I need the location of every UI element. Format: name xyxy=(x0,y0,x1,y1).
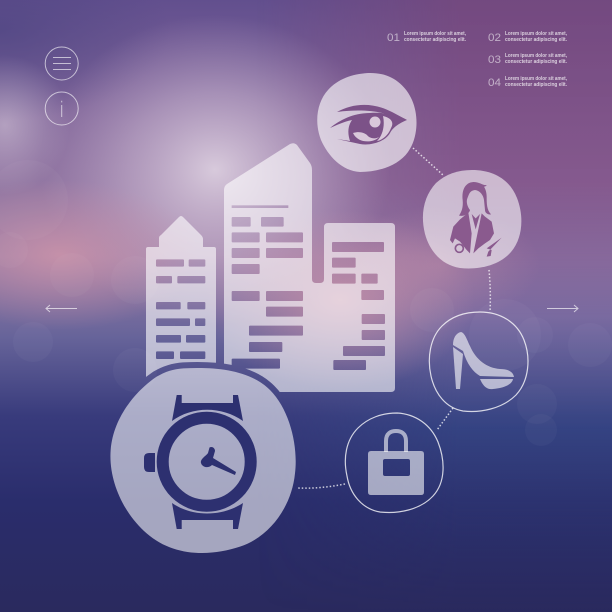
item 04: Lorem ipsum dolor sit amet, xyxy=(505,76,568,82)
legend list xyxy=(387,31,568,89)
item 02: Lorem ipsum dolor sit amet, xyxy=(505,31,568,37)
item 03: 03 xyxy=(488,54,501,66)
middle and right building xyxy=(224,143,395,392)
right arrow xyxy=(547,305,578,312)
item 03: consectetur adipiscing elit. xyxy=(505,59,568,65)
bag outline xyxy=(345,413,443,512)
icon: woman with scissors xyxy=(450,182,502,257)
item 04 xyxy=(488,76,568,89)
item 03: Lorem ipsum dolor sit amet, xyxy=(505,53,568,59)
watch blob xyxy=(110,368,296,553)
menu icon xyxy=(45,47,78,80)
eye blob xyxy=(317,73,417,172)
item 01: 01 xyxy=(387,32,400,44)
eye bubble xyxy=(317,73,417,172)
item 01 xyxy=(387,31,467,44)
item 04: 04 xyxy=(488,77,501,89)
dotted connectors xyxy=(297,148,490,488)
city buildings xyxy=(146,143,395,392)
shoe bubble xyxy=(429,312,528,411)
item 02: 02 xyxy=(488,32,501,44)
icon: high heel xyxy=(453,332,514,389)
item 01: Lorem ipsum dolor sit amet, xyxy=(404,31,467,37)
item 01: consectetur adipiscing elit. xyxy=(404,37,467,43)
item 03 xyxy=(488,53,568,66)
shoe outline xyxy=(429,312,528,411)
item 02 xyxy=(488,31,568,44)
icon: eye xyxy=(330,105,407,145)
item 02: consectetur adipiscing elit. xyxy=(505,37,568,43)
icon: bag xyxy=(368,431,424,495)
stylist blob xyxy=(423,170,521,268)
left arrow xyxy=(46,305,77,312)
info icon xyxy=(45,92,78,125)
bag bubble xyxy=(345,413,443,512)
watch bubble xyxy=(110,368,296,553)
stylist bubble xyxy=(423,170,521,268)
icon: wristwatch xyxy=(144,395,251,529)
item 04: consectetur adipiscing elit. xyxy=(505,82,568,88)
left building xyxy=(146,216,216,385)
